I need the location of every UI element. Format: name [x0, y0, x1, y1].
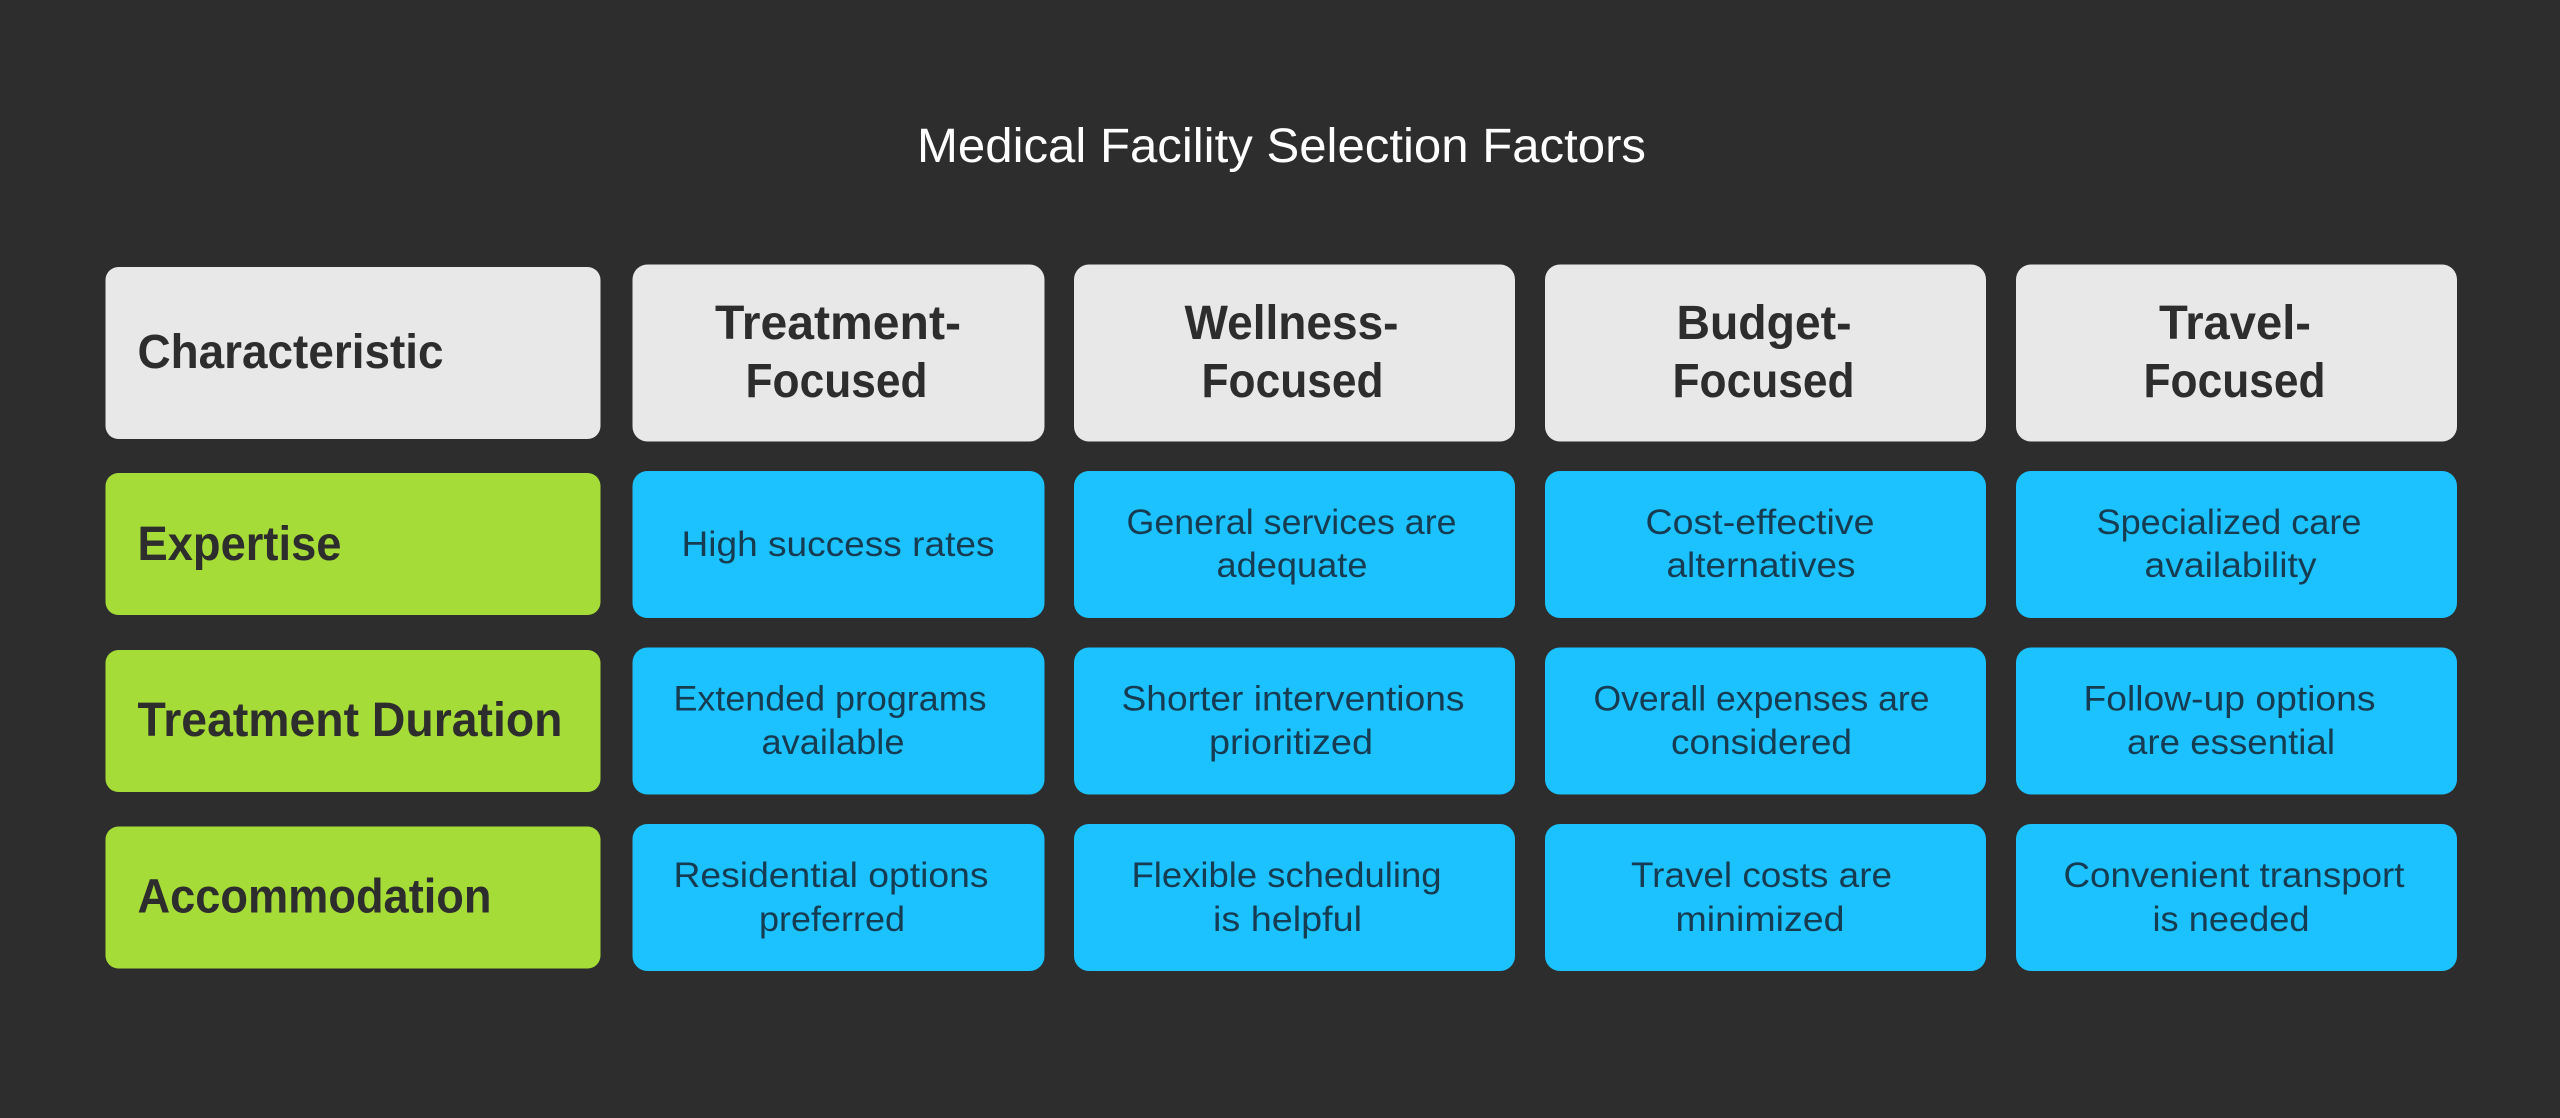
cell: Shorter interventions prioritized	[1074, 648, 1515, 794]
cell: Travel costs are minimized: minimized	[1676, 899, 1844, 939]
cell: Follow-up options are essential: Follow-up options	[2084, 678, 2376, 718]
header: Wellness-Focused	[1074, 264, 1515, 442]
header: Travel-Focused: Focused	[2144, 355, 2326, 408]
header: Budget-Focused: Focused	[1672, 355, 1854, 408]
header: Treatment-Focused: Focused	[746, 355, 928, 408]
cell: Flexible scheduling is helpful	[1074, 824, 1515, 971]
row: Expertise	[106, 471, 2457, 618]
cell: Cost-effective alternatives: alternatives	[1666, 545, 1856, 585]
cell: General services are adequate: adequate	[1216, 545, 1368, 585]
row label: Accommodation: Accommodation	[138, 870, 492, 924]
header: Treatment-Focused	[632, 264, 1044, 442]
title: Medical Facility Selection Factors	[917, 120, 1646, 173]
cell: Shorter interventions prioritized: Shorter interventions	[1122, 678, 1464, 718]
cell: Specialized care availability	[2016, 471, 2457, 618]
header: Wellness-Focused: Wellness-	[1184, 297, 1398, 350]
cell: Extended programs available: available	[762, 722, 904, 762]
row: Accommodation	[106, 824, 2457, 971]
header: Characteristic: Characteristic	[138, 326, 444, 379]
cell: General services are adequate	[1074, 471, 1515, 618]
row label: Treatment Duration	[106, 650, 600, 792]
cell: Specialized care availability: availability	[2144, 545, 2317, 585]
row: Treatment Duration	[106, 648, 2457, 794]
cell: Overall expenses are considered	[1545, 648, 1986, 794]
comparison table	[106, 264, 2457, 971]
cell: Flexible scheduling is helpful: Flexible scheduling	[1132, 855, 1442, 895]
cell: Extended programs available	[632, 648, 1044, 794]
header: Characteristic	[106, 267, 600, 439]
header row	[106, 264, 2457, 442]
cell: Residential options preferred: preferred	[759, 899, 905, 939]
cell: High success rates	[632, 471, 1044, 618]
cell: Shorter interventions prioritized: prioritized	[1209, 722, 1373, 762]
header: Travel-Focused: Travel-	[2159, 297, 2311, 350]
cell: Specialized care availability: Specialized care	[2096, 502, 2362, 542]
cell: Residential options preferred	[632, 824, 1044, 971]
header: Travel-Focused	[2016, 264, 2457, 442]
row label: Expertise	[106, 473, 600, 615]
header: Treatment-Focused: Treatment-	[715, 297, 961, 350]
cell: Follow-up options are essential: are essential	[2127, 722, 2335, 762]
header: Budget-Focused: Budget-	[1676, 297, 1852, 350]
row label: Accommodation	[106, 826, 600, 968]
cell: Convenient transport is needed: is needed	[2152, 899, 2310, 939]
cell: Overall expenses are considered: Overall expenses are	[1594, 678, 1930, 718]
cell: Cost-effective alternatives: Cost-effective	[1646, 502, 1874, 542]
cell: Flexible scheduling is helpful: is helpful	[1213, 899, 1362, 939]
cell: Overall expenses are considered: considered	[1671, 722, 1852, 762]
cell: Travel costs are minimized	[1545, 824, 1986, 971]
cell: High success rates: High success rates	[682, 524, 994, 564]
cell: Follow-up options are essential	[2016, 648, 2457, 794]
cell: Convenient transport is needed: Convenient transport	[2064, 855, 2405, 895]
cell: Extended programs available: Extended programs	[674, 678, 986, 718]
cell: Convenient transport is needed	[2016, 824, 2457, 971]
row label: Expertise: Expertise	[138, 518, 342, 571]
cell: Cost-effective alternatives	[1545, 471, 1986, 618]
header: Wellness-Focused: Focused	[1202, 355, 1384, 408]
header: Budget-Focused	[1545, 264, 1986, 442]
cell: Travel costs are minimized: Travel costs are	[1631, 855, 1892, 895]
cell: General services are adequate: General services are	[1126, 502, 1456, 542]
cell: Residential options preferred: Residential options	[674, 855, 988, 895]
row label: Treatment Duration: Treatment Duration	[138, 694, 562, 747]
